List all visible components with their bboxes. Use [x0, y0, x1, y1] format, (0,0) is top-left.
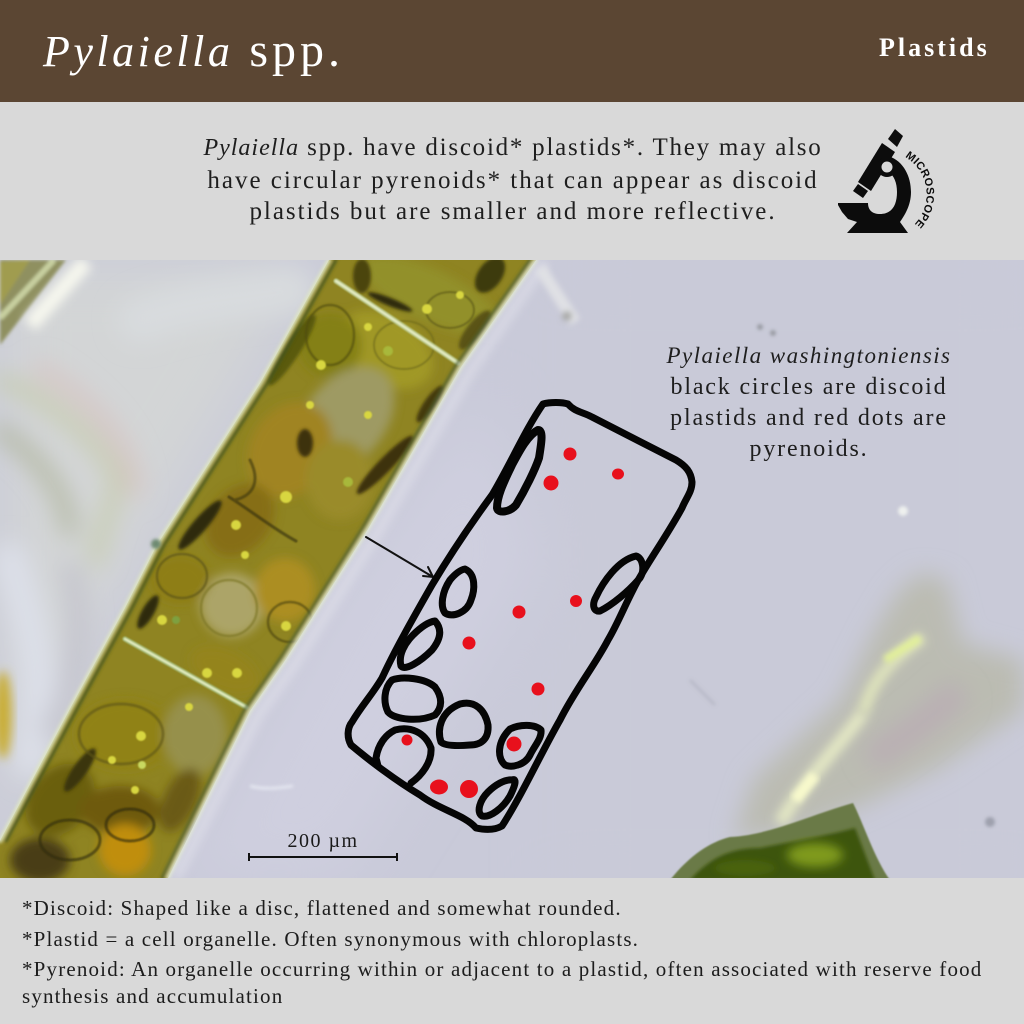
panel: intro — [0, 102, 1024, 260]
bottom green alga — [670, 803, 890, 880]
pyrenoids — [402, 448, 624, 798]
drawn cell outline — [348, 402, 692, 829]
header band — [0, 0, 1024, 102]
small specks — [151, 324, 995, 827]
photo caption: black circles are discoid — [670, 374, 947, 400]
cell outlines and rings — [40, 292, 474, 860]
footnote: discoid: *Discoid: Shaped like a disc, flattened and somewhat rounded. — [22, 896, 622, 920]
filament colour patches — [10, 240, 509, 882]
annotation: scale bar: 200 µm — [287, 830, 359, 852]
photo caption: plastids and red dots are — [670, 405, 948, 431]
footnote: plastid: *Plastid = a cell organelle. Often synonymous with chloroplasts. — [22, 927, 639, 951]
cross walls — [125, 281, 458, 707]
photo caption — [666, 343, 951, 462]
discoid plastids — [497, 430, 542, 512]
top debris — [540, 268, 575, 322]
section label: Plastids — [879, 33, 990, 62]
intro text: Pylaiella spp. have discoid* plastids*. They may also — [203, 134, 823, 161]
algal filament — [0, 240, 545, 882]
icon: microscope — [838, 129, 934, 233]
top-left filament — [0, 260, 66, 345]
left streaks — [0, 290, 290, 760]
footnote: pyrenoid: *Pyrenoid: An organelle occurring within or adjacent to a plastid, often associated with reserve food — [22, 957, 982, 981]
annotation: arrow — [366, 537, 433, 577]
left yellow patch — [0, 671, 12, 759]
photo background — [0, 260, 1024, 878]
dark chloroplast lenses — [59, 252, 511, 852]
photo caption: Pylaiella washingtoniensis — [667, 343, 951, 368]
annotation: scale bar — [248, 834, 398, 861]
photo caption: pyrenoids. — [750, 436, 868, 462]
intro text: have circular pyrenoids* that can appear as discoid — [207, 166, 819, 194]
footnote: pyrenoid: synthesis and accumulation — [22, 984, 283, 1008]
intro text: plastids but are smaller and more reflective. — [249, 198, 777, 225]
yellow granules — [108, 291, 464, 794]
photo: micrograph — [0, 260, 1024, 878]
icon: microscope: MICROSCOPE — [906, 151, 934, 229]
intro text — [203, 134, 823, 225]
title: Pylaiella spp. — [43, 24, 344, 77]
filament edge highlights — [0, 260, 536, 878]
lower-right blurred filament — [733, 573, 1024, 840]
footnote: pyrenoid — [22, 957, 982, 1008]
panel: footnotes — [0, 878, 1024, 1024]
filament halo — [176, 262, 545, 878]
